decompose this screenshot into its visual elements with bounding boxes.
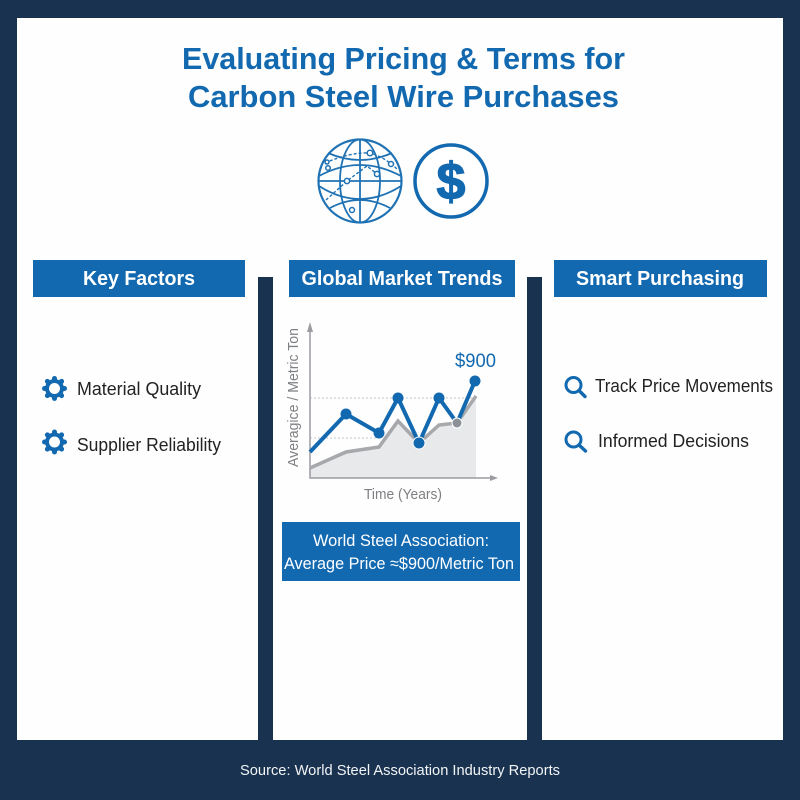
callout: World Steel Association: (313, 531, 489, 550)
axes (310, 326, 494, 478)
heading: Smart Purchasing: Smart Purchasing (576, 268, 744, 290)
icon: gear (44, 378, 64, 398)
blue series (310, 376, 480, 452)
column divider left (258, 277, 273, 740)
column divider right (527, 277, 542, 740)
title: Evaluating Pricing & Terms for (182, 41, 625, 76)
icon: dollar coin (415, 145, 487, 217)
gray series (310, 396, 476, 468)
callout: Average Price ≈$900/Metric Ton (284, 554, 514, 573)
title: Carbon Steel Wire Purchases (188, 79, 619, 114)
icon: magnifier (566, 432, 586, 451)
icon: gear (44, 432, 64, 452)
source note: Source: World Steel Association Industry Reports (240, 762, 560, 779)
x axis label: Time (Years) (364, 486, 442, 503)
list item: Supplier Reliability: Supplier Reliability (77, 435, 221, 455)
line chart (285, 322, 498, 503)
title (182, 41, 625, 114)
chart area (310, 396, 476, 478)
list item: Informed Decisions: Informed Decisions (598, 431, 749, 451)
list item: Supplier Reliability (44, 432, 221, 455)
list item: Track Price Movements: Track Price Movements (595, 376, 773, 396)
icon: globe (318, 140, 402, 222)
heading: Global Market Trends (289, 260, 515, 297)
list item: Material Quality: Material Quality (77, 379, 201, 399)
heading: Smart Purchasing (554, 260, 767, 297)
value label: $900 (455, 351, 496, 372)
heading: Global Market Trends: Global Market Trends (302, 268, 502, 290)
heading: Key Factors (33, 260, 245, 297)
y axis label: Averagice / Metric Ton (285, 328, 302, 467)
callout (282, 522, 520, 581)
icon: dollar coin: $ (437, 153, 466, 211)
icon: magnifier (566, 378, 585, 396)
heading: Key Factors: Key Factors (83, 268, 195, 290)
